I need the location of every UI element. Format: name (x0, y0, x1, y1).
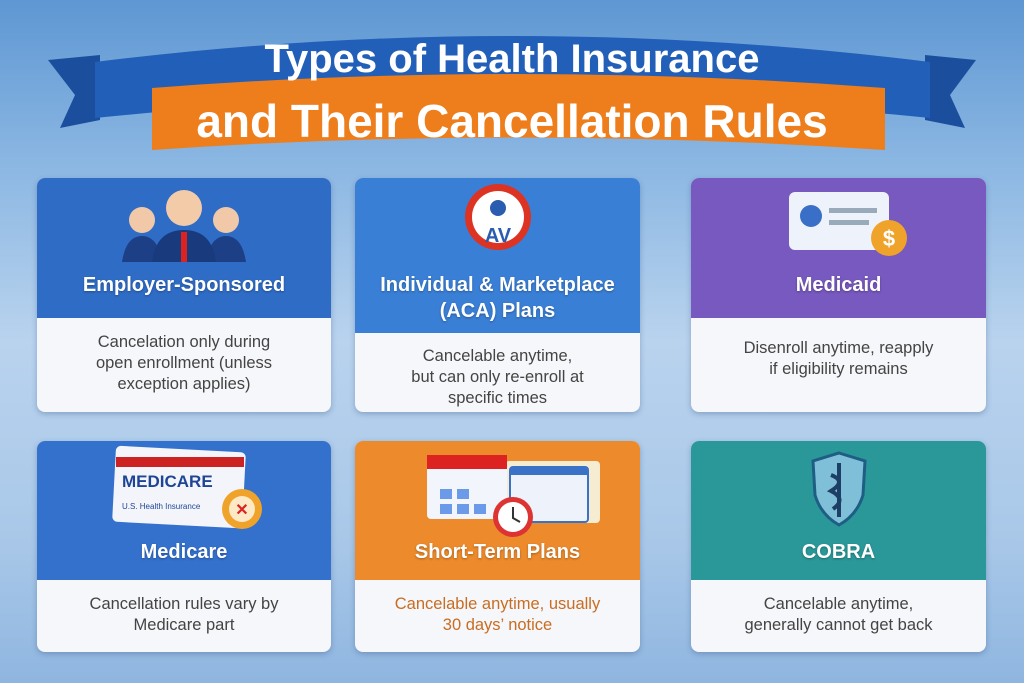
panel: short-term plans: 30 days’ notice (443, 616, 552, 634)
panel: individual marketplace: but can only re-enroll at (411, 368, 584, 386)
panel: employer-sponsored: Cancelation only during (98, 333, 270, 351)
panel: employer-sponsored: Employer-Sponsored (83, 274, 285, 296)
panel: individual marketplace: Individual & Marketplace (380, 274, 615, 296)
panel: short-term plans (355, 441, 640, 652)
title ribbon (48, 36, 976, 150)
icon: id card with coin: $ (883, 226, 895, 251)
icon: medicare card (112, 446, 262, 529)
panel: cobra: generally cannot get back (744, 616, 933, 634)
panel: medicaid: Disenroll anytime, reapply (744, 339, 933, 357)
panel: medicare (37, 441, 331, 652)
panel: medicaid: Medicaid (796, 274, 881, 296)
panel: cobra: Cancelable anytime, (764, 595, 913, 613)
icon: calendar and clock (427, 455, 600, 537)
panel: individual marketplace: (ACA) Plans (440, 300, 555, 322)
panel: cobra (691, 441, 986, 652)
panel: medicare: Medicare (141, 541, 227, 563)
icon: ACA badge: AV (485, 225, 512, 247)
panel: employer-sponsored (37, 178, 331, 412)
panel: employer-sponsored: exception applies) (118, 375, 250, 393)
panel: cobra: COBRA (802, 541, 875, 563)
panel: individual marketplace: specific times (448, 389, 547, 407)
panel: medicaid: if eligibility remains (769, 360, 908, 378)
panel: employer-sponsored: open enrollment (unless (96, 354, 272, 372)
panel: short-term plans: Cancelable anytime, usually (395, 595, 600, 613)
title text (196, 37, 828, 147)
panel: individual marketplace: Cancelable anytime, (423, 347, 572, 365)
panel: medicaid (691, 178, 986, 412)
title text: Types of Health Insurance (265, 37, 759, 81)
panel: short-term plans: Short-Term Plans (415, 541, 580, 563)
title text: and Their Cancellation Rules (196, 95, 828, 147)
panel: individual marketplace (355, 178, 640, 412)
icon: shield (812, 452, 866, 527)
icon: people (122, 190, 246, 262)
icon: id card with coin (789, 192, 907, 256)
icon: medicare card: ✕ (235, 502, 249, 519)
icon: medicare card: U.S. Health Insurance (122, 502, 201, 511)
icon: medicare card: MEDICARE (122, 472, 213, 491)
icon: ACA badge (465, 184, 531, 250)
panel: medicare: Medicare part (134, 616, 234, 634)
panel: medicare: Cancellation rules vary by (90, 595, 278, 613)
